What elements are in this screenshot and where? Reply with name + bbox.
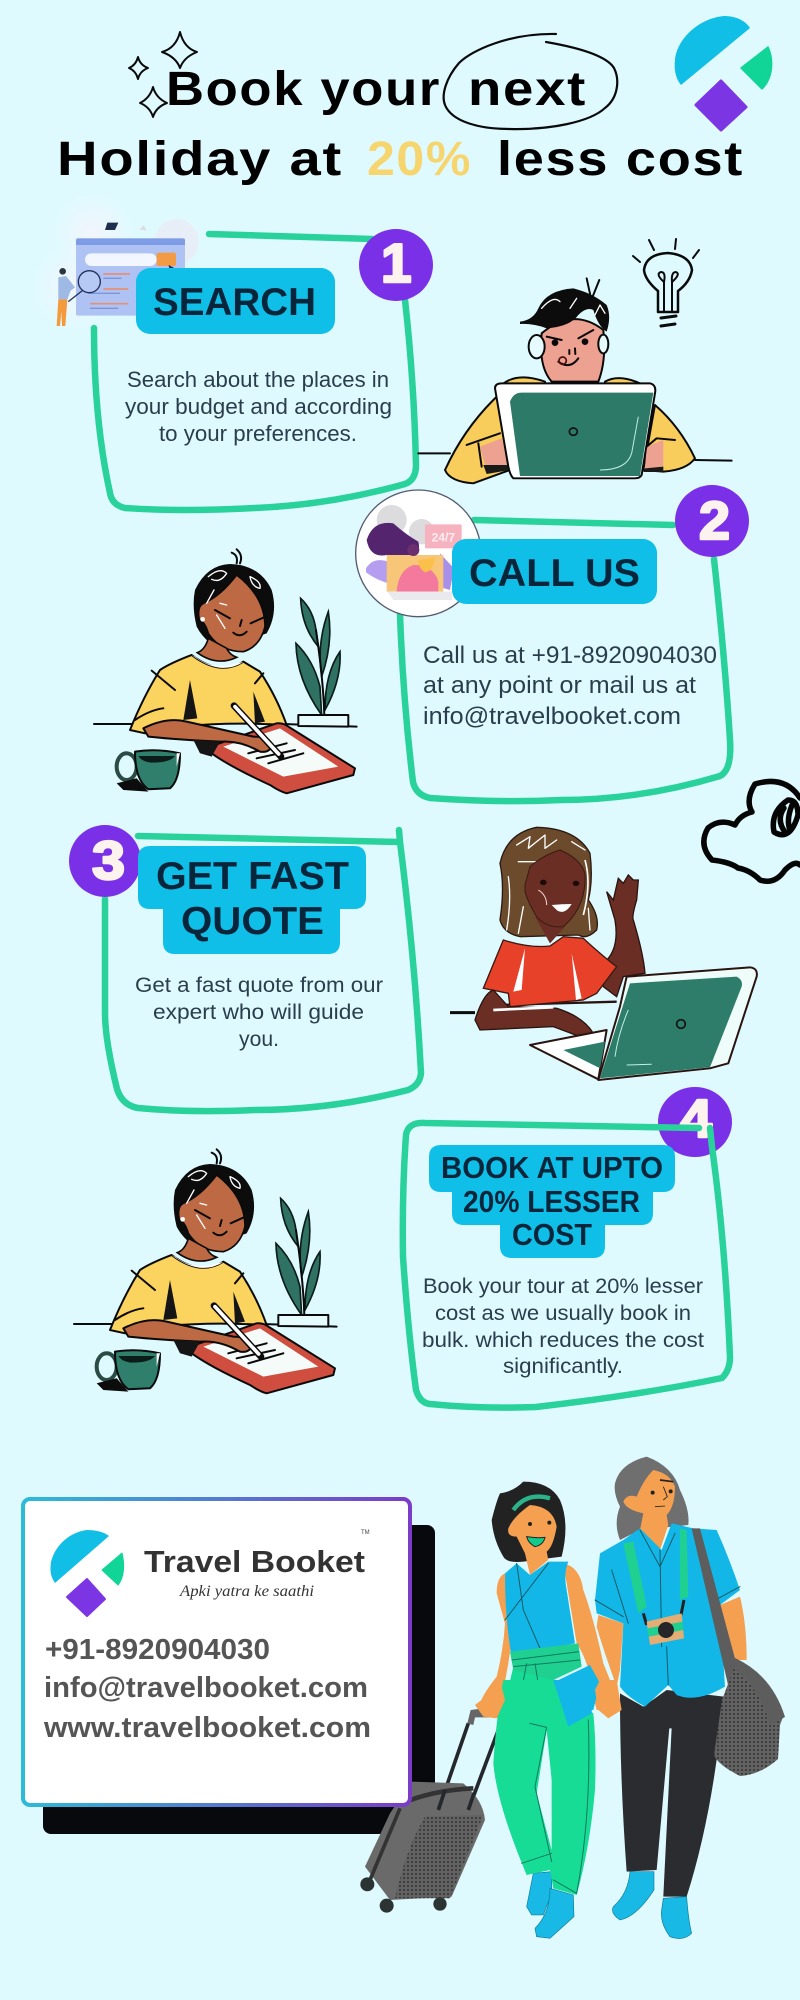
text: search description: your budget and according [125, 394, 392, 419]
plant [296, 598, 348, 727]
text: book description: Book your tour at 20% lesser [423, 1275, 703, 1298]
panel: step 4 book at upto 20% lesser cost [403, 1087, 732, 1408]
panel: step 3 get fast quote [69, 825, 421, 1111]
panel outline [403, 1123, 730, 1408]
heading: get fast quote: GET FAST [156, 855, 349, 898]
panel: step 2 call us [356, 485, 749, 801]
text: book description: cost as we usually book in [435, 1302, 691, 1325]
text: call us description [423, 642, 717, 730]
pen [234, 706, 281, 757]
title: Book your [166, 63, 441, 116]
step badge 3: 3 [92, 831, 125, 891]
icon: logo top right [675, 16, 772, 130]
title [57, 63, 744, 186]
step badge 1 [359, 229, 433, 301]
contact details: info@travelbooket.com [44, 1672, 368, 1704]
step badge 2: 2 [699, 491, 730, 551]
icon: support agent in circle [356, 490, 481, 617]
text: call us description: Call us at +91-8920904030 [423, 642, 717, 669]
icon: hand-drawn ellipse around next [444, 34, 617, 129]
text: book description [422, 1275, 704, 1378]
text: search description: to your preferences. [159, 421, 357, 446]
illustration: boy at laptop [418, 278, 732, 483]
hair [500, 827, 597, 937]
panel outline [105, 830, 421, 1111]
arm [143, 720, 272, 752]
hair [194, 564, 274, 650]
laptop [530, 1030, 607, 1079]
text: book description: bulk. which reduces the cost [422, 1329, 704, 1352]
tablet [210, 723, 355, 793]
illustration: travelling couple [475, 1457, 785, 1939]
step badge 3 [69, 825, 141, 897]
illustration: woman writing on tablet [94, 549, 357, 793]
contact details [43, 1634, 371, 1744]
face [199, 575, 265, 652]
man legs and shoes [612, 1690, 724, 1939]
card shadow [43, 1525, 435, 1834]
step badge 2 [675, 485, 749, 557]
shirt [483, 937, 617, 1007]
heading: book at upto: BOOK AT UPTO [441, 1150, 663, 1185]
cup [117, 753, 137, 780]
illustration: suitcase [360, 1706, 502, 1913]
text: quote description: Get a fast quote from our [135, 974, 383, 997]
icon: logo [50, 1530, 124, 1616]
brand name: Travel Booket [144, 1544, 365, 1579]
contact details: +91-8920904030 [45, 1634, 270, 1666]
heading: get fast quote [138, 846, 366, 954]
heading: search: SEARCH [153, 281, 316, 324]
panel outline [400, 520, 730, 801]
heading: book at upto [429, 1145, 675, 1258]
heading: book at upto: COST [512, 1217, 592, 1252]
text: call us description: info@travelbooket.com [423, 703, 681, 730]
man upper body [595, 1457, 747, 1707]
heading: call us: CALL US [469, 552, 640, 595]
title: less cost [497, 133, 744, 186]
title: next [468, 63, 587, 116]
heading: call us [452, 539, 657, 604]
heading: book at upto: 20% LESSER [463, 1184, 640, 1219]
heading: search [136, 268, 335, 334]
resting arm [475, 990, 593, 1037]
trademark: TM [361, 1530, 370, 1536]
step badge 1: 1 [381, 232, 412, 294]
card [23, 1499, 410, 1805]
title: Holiday at [57, 133, 343, 186]
illustration: woman writing on tablet second [74, 1149, 337, 1393]
step badge 4: 4 [680, 1089, 712, 1149]
text: quote description: you. [239, 1028, 279, 1051]
text: quote description [135, 974, 383, 1051]
text: quote description: expert who will guide [153, 1001, 364, 1024]
panel: step 1 search [33, 193, 433, 510]
icon: scribble cloud [704, 781, 800, 881]
text: book description: significantly. [503, 1355, 623, 1378]
panel: contact card [23, 1499, 410, 1805]
shoulder bag [714, 1660, 783, 1776]
icon: sparkles [129, 32, 197, 117]
woman upper body [480, 1482, 617, 1710]
bag flap [735, 1658, 785, 1725]
neck and face [535, 917, 565, 943]
step badge 4 [658, 1087, 732, 1157]
shirt [130, 655, 287, 733]
text: search description: Search about the places in [127, 367, 389, 392]
woman lower body [475, 1680, 622, 1938]
raised arm [603, 875, 645, 997]
icon: search window illustration [33, 193, 199, 330]
tagline: Apki yatra ke saathi [179, 1583, 314, 1600]
contact details: www.travelbooket.com [43, 1712, 371, 1744]
title: 20% [367, 133, 472, 186]
icon: light bulb [633, 239, 699, 326]
panel outline [94, 234, 416, 510]
heading: get fast quote: QUOTE [181, 900, 324, 943]
text: search description [125, 367, 392, 446]
illustration: woman waving at laptop [450, 827, 757, 1080]
text: call us description: at any point or mail us at [423, 672, 696, 699]
icon: support agent in circle: 24/7 [432, 531, 455, 545]
